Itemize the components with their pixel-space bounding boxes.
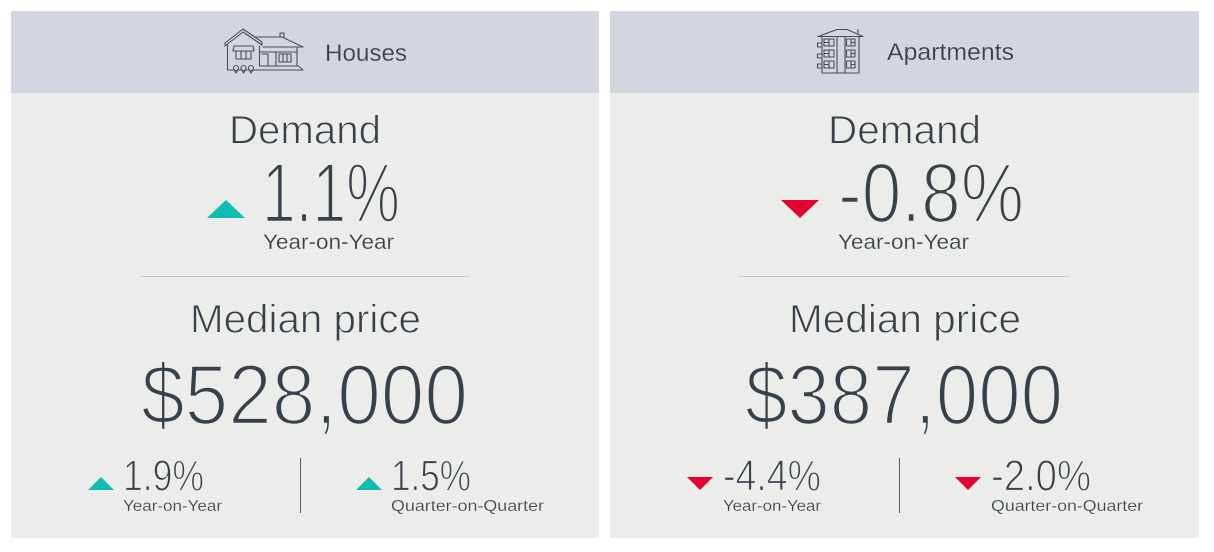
year on year value: 1.9% — [123, 452, 204, 500]
apartments header band — [610, 11, 1199, 93]
demand value: 1.1% — [262, 146, 400, 240]
median price label: Median price — [190, 298, 421, 342]
year on year label: Year-on-Year — [723, 498, 822, 515]
median price value: $528,000 — [141, 348, 468, 443]
quarter on quarter label: Quarter-on-Quarter — [991, 498, 1144, 515]
demand value: -0.8% — [838, 146, 1024, 240]
year on year value: -4.4% — [723, 452, 821, 500]
demand label: Demand — [828, 108, 981, 152]
icon: up triangle quarter on quarter — [356, 477, 382, 490]
icon: apartment building — [818, 30, 863, 73]
icon: down triangle quarter on quarter — [955, 477, 981, 490]
icon: up triangle — [207, 200, 245, 218]
quarter on quarter value: -2.0% — [991, 452, 1091, 500]
quarter on quarter value: 1.5% — [391, 452, 471, 500]
year on year label: Year-on-Year — [123, 498, 223, 515]
houses header band — [11, 11, 599, 93]
icon: up triangle year on year — [88, 477, 114, 490]
quarter on quarter label: Quarter-on-Quarter — [391, 498, 545, 515]
demand period label: Year-on-Year — [838, 231, 969, 254]
median price value: $387,000 — [745, 348, 1063, 443]
demand period label: Year-on-Year — [263, 231, 394, 254]
apartments heading: Apartments — [887, 39, 1014, 66]
icon: down triangle — [781, 200, 819, 218]
median price label: Median price — [789, 298, 1021, 342]
panel: houses — [11, 11, 599, 538]
icon: house — [225, 29, 303, 73]
panel: apartments — [610, 11, 1199, 538]
demand label: Demand — [229, 108, 381, 152]
icon: down triangle year on year — [687, 477, 713, 490]
houses heading: Houses — [325, 40, 407, 67]
